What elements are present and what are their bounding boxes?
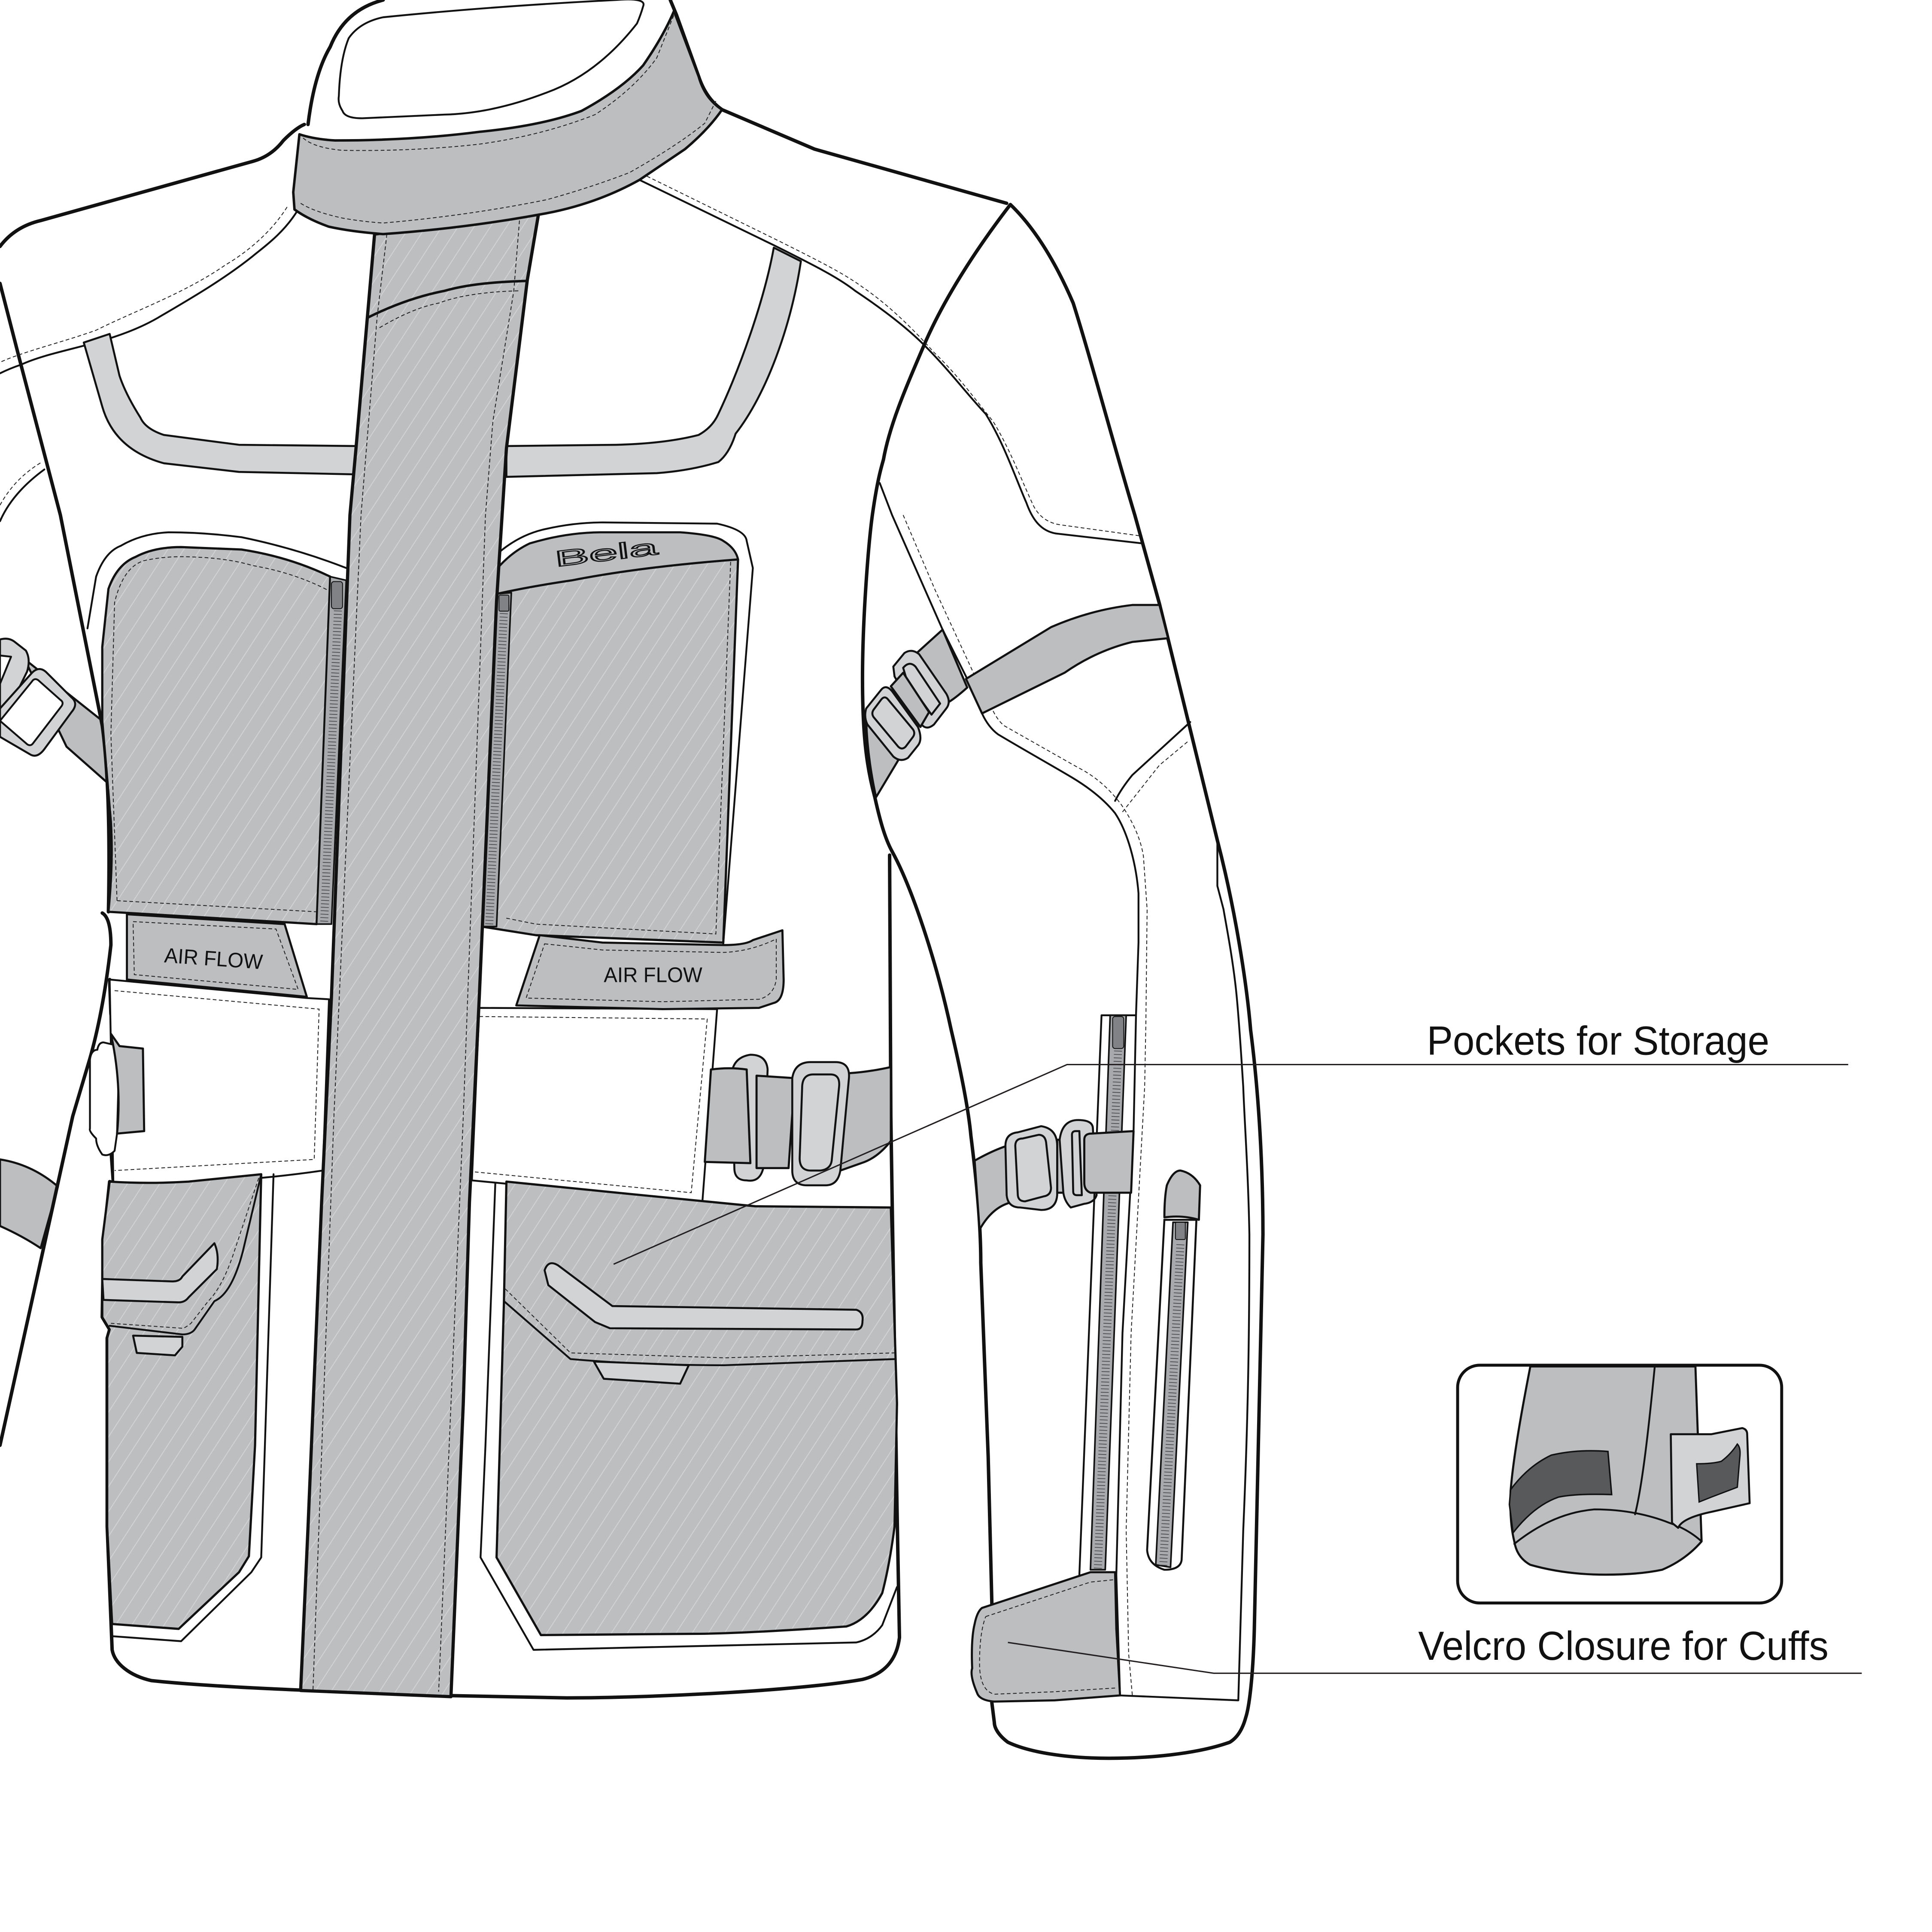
arm band	[966, 605, 1168, 714]
sleeve inner seam	[880, 483, 1249, 1700]
velcro strip dark	[1510, 1451, 1612, 1533]
leader line: pockets	[614, 1065, 1848, 1264]
left arm straps and buckles	[0, 639, 109, 1248]
collar	[293, 0, 722, 234]
elbow seam	[1115, 722, 1190, 801]
logo band	[497, 532, 738, 594]
right sleeve	[863, 204, 1263, 1758]
velcro tab	[1671, 1428, 1750, 1528]
sleeve small zipper pocket	[1147, 1170, 1200, 1570]
right air flow tab	[516, 930, 784, 1009]
left side tab	[90, 1034, 144, 1155]
inset: cuff detail	[1458, 1365, 1782, 1603]
collar flap	[293, 11, 722, 234]
right waist band	[472, 1008, 717, 1203]
label: velcro closure for cuffs: Velcro Closure for Cuffs	[1418, 1623, 1829, 1669]
cuff body	[1510, 1367, 1701, 1575]
pocket pull tab	[594, 1361, 689, 1384]
right chest mesh panel	[482, 522, 753, 944]
pocket pull tab	[133, 1336, 182, 1355]
left chest zipper	[317, 577, 346, 924]
yoke trim strips	[84, 248, 801, 477]
jacket body outline	[0, 0, 1007, 1698]
right lower pocket	[480, 1182, 897, 1650]
waist strap and buckles	[705, 1055, 891, 1185]
right chest zipper	[482, 592, 511, 927]
pocket flap strip	[102, 1243, 218, 1302]
left lower pocket	[102, 1174, 273, 1641]
velcro tab dark patch	[1697, 1444, 1740, 1502]
sleeve lower strap and buckle	[975, 1120, 1097, 1230]
zipper cap	[1164, 1170, 1200, 1220]
sleeve long zipper	[1079, 1015, 1135, 1575]
collar opening	[339, 0, 644, 118]
centre placket	[301, 214, 538, 1697]
right shoulder seam	[639, 176, 1142, 544]
right air flow tab: AIR FLOW	[604, 963, 702, 987]
leader line: cuffs	[1008, 1643, 1862, 1673]
left chest mesh panel	[88, 532, 346, 924]
cuff velcro flap	[972, 1572, 1120, 1701]
left waist band	[109, 980, 329, 1183]
pocket flap strip	[544, 1263, 863, 1330]
left air flow tab	[127, 914, 307, 997]
sleeve upper strap and buckle	[865, 630, 967, 797]
label: pockets for storage: Pockets for Storage	[1427, 1018, 1769, 1064]
left air flow tab: AIR FLOW	[164, 944, 264, 974]
brand logo: Bela	[553, 534, 659, 571]
